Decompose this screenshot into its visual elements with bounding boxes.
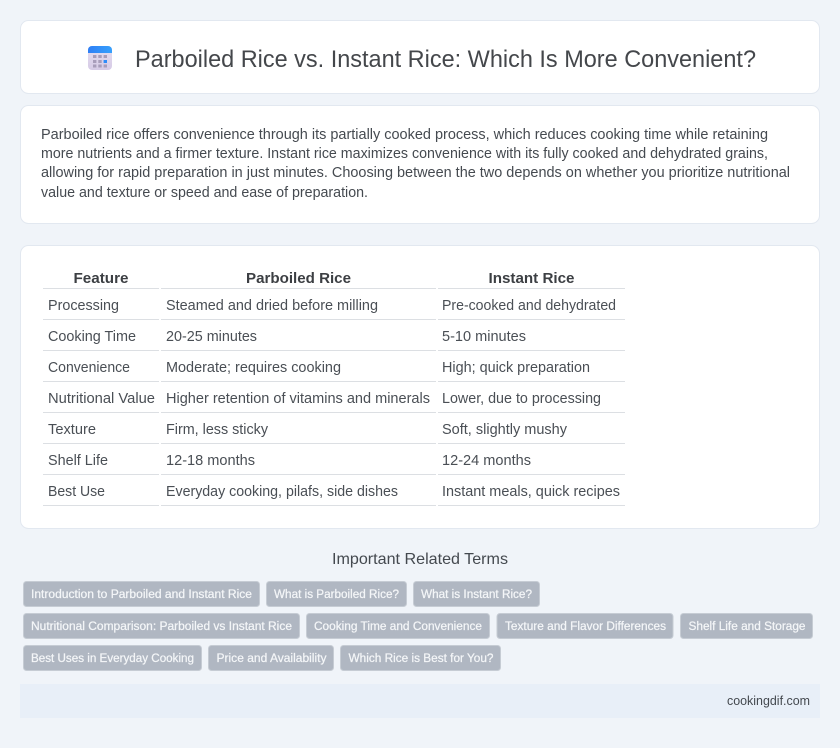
row: convenience: High; quick preparation [442,360,590,376]
chip [24,646,202,670]
row: texture: Texture [48,422,96,438]
chip [208,646,334,670]
chip: What is Parboiled Rice? [274,587,399,601]
heading: important related terms: Important Related Terms [332,551,508,568]
panel: comparison table [20,246,820,528]
row: convenience: Convenience [48,360,130,376]
table header: Feature [74,270,128,287]
row: processing: Pre-cooked and dehydrated [442,298,616,314]
row: cooking time [48,329,526,345]
header panel [20,20,820,94]
row: shelf life: Shelf Life [48,453,108,469]
row: processing [48,298,616,314]
footer site name: cookingdif.com [727,693,810,708]
table header [74,270,574,287]
panel: introduction paragraph: Parboiled rice offers convenience through its partially cooked process, which reduces cooking time while retaining [41,127,768,143]
chip: Price and Availability [216,651,327,665]
chip [306,614,490,638]
row: nutritional value: Higher retention of vitamins and minerals [166,391,430,407]
chip [340,646,500,670]
row: convenience [48,360,590,376]
row: cooking time: 20-25 minutes [166,329,257,345]
chip [680,614,812,638]
title: Parboiled Rice vs. Instant Rice: Which Is More Convenient? [135,46,756,73]
row: nutritional value [48,391,601,407]
row: convenience: Moderate; requires cooking [166,360,341,376]
row: shelf life [48,453,531,469]
row: processing: Steamed and dried before milling [166,298,378,314]
row: nutritional value: Lower, due to processing [442,391,601,407]
chip [414,582,540,606]
panel: introduction paragraph: more nutrients and a firmer texture. Instant rice maximizes convenience with its fully cooked and dehydrated grains, [41,146,768,162]
chip [24,614,300,638]
row: best use [48,484,620,500]
table header: Instant Rice [488,270,574,287]
row: shelf life: 12-24 months [442,453,531,469]
row: best use: Everyday cooking, pilafs, side dishes [166,484,398,500]
icon: calendar [88,46,112,70]
chip [497,614,673,638]
panel: introduction paragraph [20,106,820,224]
chip [24,582,260,606]
related terms chips [24,582,812,670]
chip: Shelf Life and Storage [688,619,806,633]
row: nutritional value: Nutritional Value [48,391,155,407]
row: cooking time: Cooking Time [48,329,136,345]
row: cooking time: 5-10 minutes [442,329,526,345]
row: texture [48,422,568,438]
chip: Texture and Flavor Differences [505,619,666,633]
panel: introduction paragraph: value and texture or speed and ease of preparation. [41,185,368,201]
chip: Nutritional Comparison: Parboiled vs Instant Rice [31,619,292,633]
row: processing: Processing [48,298,119,314]
chip: Introduction to Parboiled and Instant Rice [31,587,252,601]
footer bar [20,684,820,718]
row: texture: Firm, less sticky [166,422,269,438]
row: shelf life: 12-18 months [166,453,255,469]
table header: Parboiled Rice [246,270,351,287]
panel: introduction paragraph: allowing for rapid preparation in just minutes. Choosing between the two depends on whether you prioritize nutritional [41,165,790,181]
row: best use: Instant meals, quick recipes [442,484,620,500]
row: best use: Best Use [48,484,105,500]
chip: What is Instant Rice? [421,587,532,601]
chip: Best Uses in Everyday Cooking [31,651,194,665]
chip: Which Rice is Best for You? [348,651,494,665]
chip: Cooking Time and Convenience [314,619,482,633]
chip [266,582,406,606]
row: texture: Soft, slightly mushy [442,422,568,438]
